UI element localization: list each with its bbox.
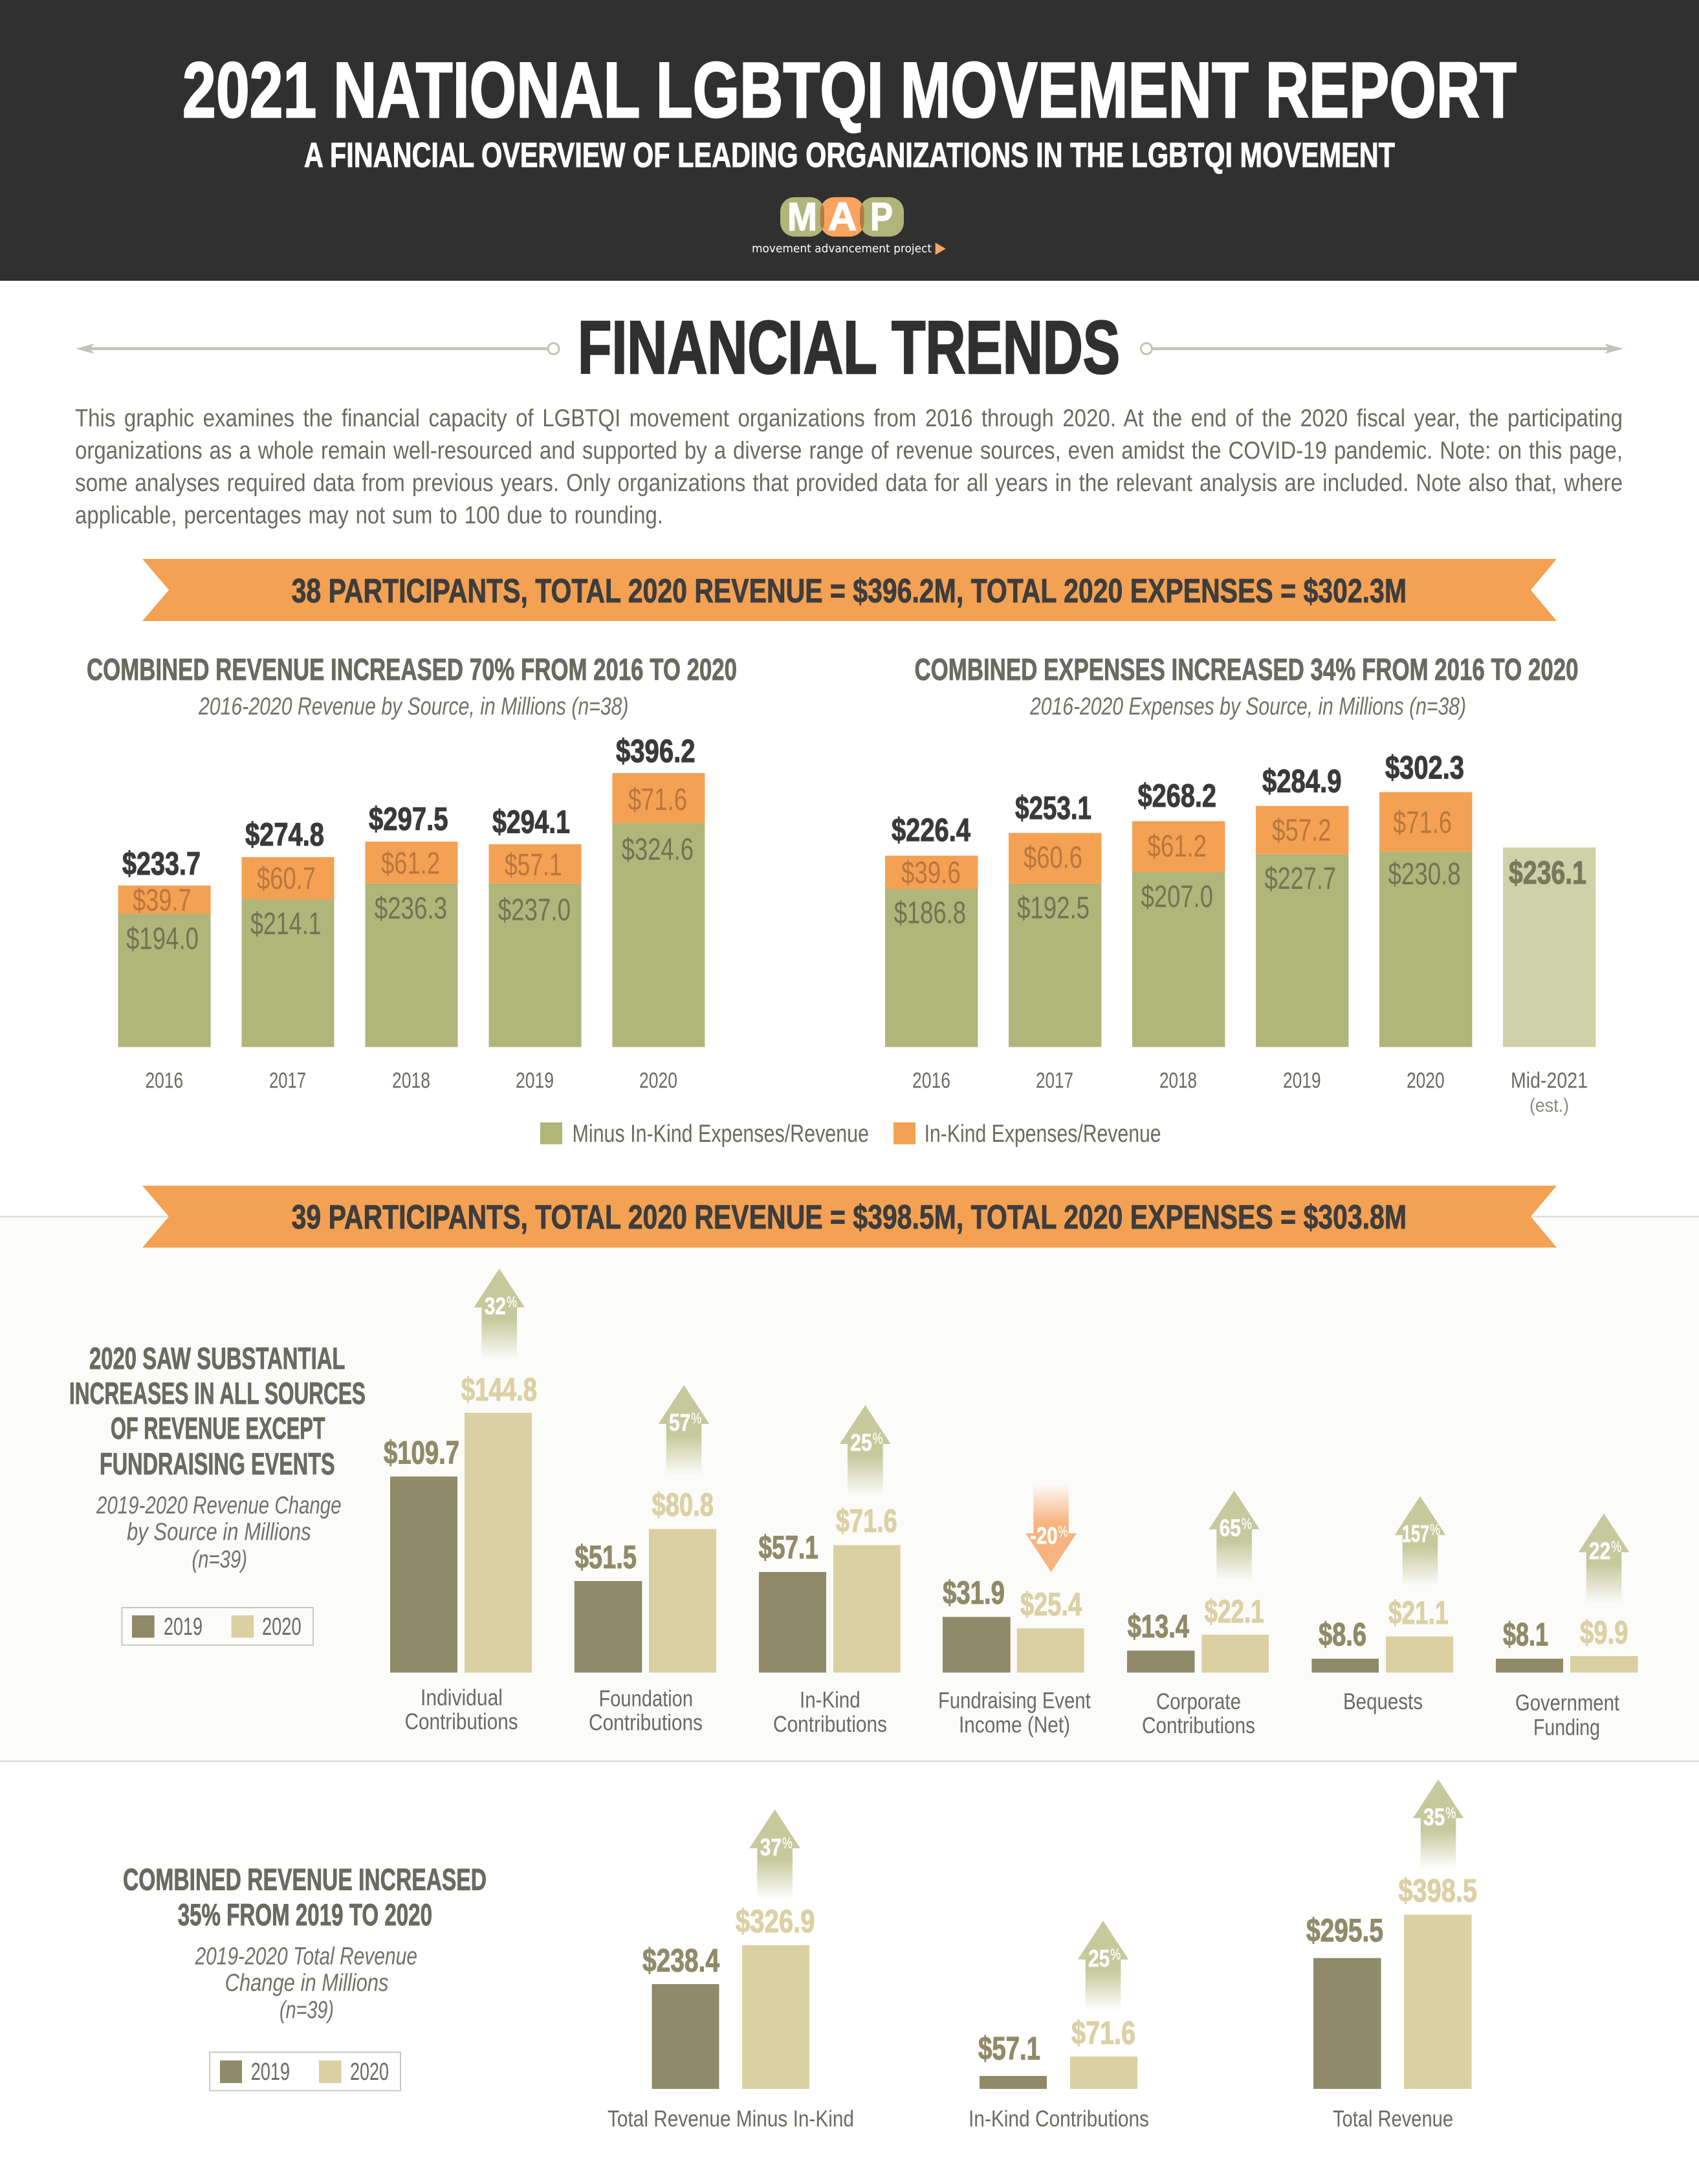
intro paragraph [75,405,1623,529]
bar: expenses 2020: $230.8 [1388,857,1461,891]
chart: government funding: Government [1515,1690,1619,1716]
arrow: 22% increase [1579,1513,1629,1603]
bar: expenses 2019: $227.7 [1264,862,1336,896]
arrow: 65% increase: 65 [1220,1515,1241,1542]
chart: in-kind contributions total: $71.6 [1071,2015,1135,2051]
text block: revenue change by source [69,1341,366,1573]
legend: 2019 and 2020, total revenue: 2020 [350,2058,389,2086]
bar: expenses 2016: 2016 [912,1069,950,1093]
arrow: 25% increase: % [873,1430,883,1448]
chart: individual contributions [384,1269,537,1734]
section heading: financial trends [76,305,1623,389]
legend: 2019 and 2020 [122,1608,313,1645]
text block: combined revenue increase: COMBINED REVENUE INCREASED [123,1862,487,1897]
bar: revenue 2018: $61.2 [381,847,440,881]
bar: expenses 2018: $61.2 [1148,829,1207,864]
bar: revenue 2017: $60.7 [257,862,316,896]
arrow: 57% increase: % [691,1410,701,1428]
chart: total revenue minus in-kind [608,1809,854,2132]
legend: 2019 and 2020: 2019 [164,1613,203,1641]
chart: foundation contributions: Contributions [589,1710,703,1735]
logo: MAP: movement advancement project [752,242,932,256]
chart: government funding [1496,1513,1638,1740]
bar: expenses 2020: $71.6 [1393,806,1452,840]
panel background: revenue by source [0,1217,1699,1762]
arrow: 157% increase: 157 [1402,1520,1429,1547]
chart: fundraising event income: $31.9 [943,1575,1005,1611]
chart: total revenue: $398.5 [1398,1873,1477,1909]
panel: combined expenses chart [885,652,1595,1117]
bar: expenses 2016: $226.4 [892,812,970,848]
chart: individual contributions: Individual [421,1685,503,1710]
bar: revenue 2017 [242,816,334,1093]
bar: expenses 2017: $60.6 [1024,841,1082,875]
bar: expenses 2017: $192.5 [1017,891,1090,926]
arrow: 35% increase [1413,1779,1463,1870]
section heading: financial trends: FINANCIAL TRENDS [578,305,1120,389]
intro paragraph: applicable, percentages may not sum to 100 due to rounding. [75,502,663,529]
arrow: 57% increase [659,1385,709,1475]
bar: revenue 2018: $297.5 [369,801,448,837]
arrow: 157% increase: % [1430,1521,1440,1538]
banner: 39 participants [142,1186,1557,1247]
text block: revenue change by source: 2020 SAW SUBSTANTIAL [89,1341,345,1375]
bar: revenue 2017: $274.8 [245,816,324,853]
bar: revenue 2020 [612,733,705,1093]
chart: total revenue minus in-kind: Total Revenue Minus In-Kind [608,2106,854,2132]
bar: revenue 2018: $236.3 [375,891,447,926]
chart: total revenue: Total Revenue [1333,2106,1453,2132]
chart: fundraising event income [938,1484,1091,1738]
chart: foundation contributions: $80.8 [652,1487,714,1523]
bar: expenses 2017: 2017 [1036,1069,1073,1093]
banner: 39 participants: 39 PARTICIPANTS, TOTAL 2020 REVENUE = $398.5M, TOTAL 2020 EXPENSES = $303.8M [292,1199,1407,1236]
bar: revenue 2019: $57.1 [505,848,562,882]
chart: in-kind contributions: $57.1 [758,1529,818,1566]
text block: combined revenue increase: Change in Millions [225,1970,388,1997]
text block: combined revenue increase: 35% FROM 2019 TO 2020 [178,1897,432,1932]
arrow: 25% increase: 25 [850,1430,872,1456]
bar: revenue 2018: 2018 [392,1069,430,1093]
bar: expenses 2016: $39.6 [901,856,961,890]
chart: in-kind contributions total: In-Kind Contributions [969,2106,1149,2132]
chart: government funding: $9.9 [1580,1615,1628,1651]
chart: in-kind contributions total [969,1921,1149,2132]
chart: in-kind contributions: $71.6 [836,1503,897,1539]
chart: individual contributions: Contributions [405,1709,518,1734]
arrow: 35% increase: % [1445,1805,1456,1822]
text block: revenue change by source: FUNDRAISING EVENTS [100,1447,335,1481]
bar: revenue 2020: $324.6 [622,833,694,867]
legend: 2019 and 2020, total revenue: 2019 [251,2058,290,2086]
legend: expenses and revenue: Minus In-Kind Expenses/Revenue [572,1120,869,1148]
chart: total revenue minus in-kind: $326.9 [736,1903,815,1939]
logo: MAP: A [828,195,857,239]
arrow: 157% increase [1395,1496,1445,1586]
arrow: 25% increase, in-kind [1078,1921,1128,2011]
logo: MAP: P [870,195,893,239]
chart: total revenue: $295.5 [1306,1912,1383,1949]
text block: combined revenue increase: (n=39) [280,1997,334,2024]
subtitle: A FINANCIAL OVERVIEW OF LEADING ORGANIZATIONS IN THE LGBTQI MOVEMENT [304,136,1395,175]
text block: revenue change by source: by Source in Millions [127,1519,311,1546]
header band [0,0,1699,281]
chart: corporate contributions [1127,1491,1269,1738]
bar: expenses 2020: 2020 [1407,1069,1445,1093]
bar: revenue 2019: 2019 [516,1069,554,1093]
bar: expenses 2018: 2018 [1159,1069,1197,1093]
chart: bequests [1311,1496,1453,1714]
arrow: 25% increase [840,1405,891,1495]
bar: expenses 2019: 2019 [1283,1069,1321,1093]
bar: expenses mid-2021 estimate [1503,847,1595,1117]
bar: revenue 2016 [118,846,211,1093]
bar: revenue 2019: $294.1 [492,804,570,840]
chart: individual contributions: $144.8 [461,1371,537,1408]
bar: revenue 2016: 2016 [145,1069,183,1093]
heading: revenue: COMBINED REVENUE INCREASED 70% FROM 2016 TO 2020 [87,652,737,686]
chart: fundraising event income: Income (Net) [959,1712,1070,1738]
arrow: 22% increase: 22 [1589,1538,1610,1564]
bar: expenses 2017 [1009,790,1101,1093]
text block: revenue change by source: 2019-2020 Revenue Change [96,1492,342,1519]
chart: government funding: Funding [1533,1715,1600,1740]
text block: revenue change by source: (n=39) [192,1546,247,1573]
bar: revenue 2016: $39.7 [133,884,192,918]
bar: revenue 2017: 2017 [269,1069,306,1093]
arrow: 37% increase: 37 [760,1834,782,1861]
bar: expenses 2019: $57.2 [1272,814,1332,848]
arrow: 25% increase, in-kind: 25 [1088,1945,1110,1972]
chart: bequests: $21.1 [1388,1595,1448,1631]
chart: foundation contributions [575,1385,716,1735]
bar: expenses 2020: $302.3 [1385,749,1464,785]
chart: corporate contributions: $22.1 [1205,1593,1264,1630]
chart: total revenue [1306,1779,1477,2132]
subheading: expenses: 2016-2020 Expenses by Source, in Millions (n=38) [1029,693,1466,721]
arrow: 22% increase: % [1611,1538,1621,1556]
text block: revenue change by source: INCREASES IN ALL SOURCES [69,1376,366,1410]
arrow: 37% increase: % [782,1835,793,1852]
chart: in-kind contributions: Contributions [773,1712,887,1737]
subheading: revenue: 2016-2020 Revenue by Source, in Millions (n=38) [198,693,629,721]
bar: revenue 2020: $71.6 [628,783,687,817]
chart: total revenue minus in-kind: $238.4 [642,1943,719,1979]
arrow: 25% increase, in-kind: % [1110,1946,1121,1963]
bar: revenue 2017: $214.1 [250,907,322,941]
arrow: 20% decrease [1025,1484,1077,1572]
arrow: 65% increase: % [1242,1516,1252,1533]
bar: revenue 2016: $233.7 [122,846,201,882]
legend: expenses and revenue [540,1120,1161,1148]
bar: revenue 2020: $396.2 [616,733,695,769]
chart: corporate contributions: Corporate [1156,1689,1241,1714]
logo: MAP: M [787,195,817,239]
arrow: 57% increase: 57 [669,1410,690,1436]
arrow: 20% decrease: -20 [1030,1523,1058,1549]
bar: revenue 2019 [489,804,581,1093]
bar: expenses 2018: $207.0 [1141,880,1213,914]
bar: expenses 2019 [1256,763,1348,1093]
arrow: 65% increase [1209,1491,1260,1580]
chart: foundation contributions: Foundation [599,1687,693,1712]
banner: 38 participants [142,559,1557,621]
chart: individual contributions: $109.7 [384,1434,459,1470]
bar: expenses mid-2021 estimate: $236.1 [1509,855,1586,891]
chart: bequests: $8.6 [1319,1617,1366,1653]
chart: fundraising event income: Fundraising Event [938,1688,1091,1714]
chart: government funding: $8.1 [1503,1617,1548,1653]
text block: combined revenue increase: 2019-2020 Total Revenue [195,1943,417,1971]
arrow: 32% increase: % [507,1294,517,1311]
arrow: 20% decrease: % [1058,1523,1068,1541]
bar: expenses 2020 [1379,749,1472,1093]
bar: revenue 2020: 2020 [639,1069,677,1093]
banner: 38 participants: 38 PARTICIPANTS, TOTAL 2020 REVENUE = $396.2M, TOTAL 2020 EXPENSES = $302.3M [292,573,1407,610]
chart: in-kind contributions total: $57.1 [978,2031,1040,2067]
bar: expenses 2016: $186.8 [894,896,966,930]
bar: expenses mid-2021 estimate: (est.) [1529,1095,1569,1117]
chart: corporate contributions: Contributions [1142,1713,1255,1738]
bar: expenses 2016 [885,812,978,1093]
bar: expenses mid-2021 estimate: Mid-2021 [1511,1069,1588,1093]
arrow: 35% increase: 35 [1423,1804,1445,1831]
bar: revenue 2019: $237.0 [498,893,571,928]
bar: expenses 2019: $284.9 [1262,763,1342,800]
bar: revenue 2018 [365,801,458,1093]
chart: fundraising event income: $25.4 [1020,1586,1082,1622]
panel: combined revenue chart [87,652,737,1093]
arrow: 32% increase [474,1269,525,1359]
arrow: 37% increase [749,1809,800,1899]
bar: expenses 2018: $268.2 [1138,778,1216,814]
text block: revenue change by source: OF REVENUE EXCEPT [111,1411,325,1445]
arrow: 32% increase: 32 [485,1293,506,1320]
logo: MAP [752,195,946,256]
chart: foundation contributions: $51.5 [575,1539,637,1575]
chart: in-kind contributions [758,1405,901,1737]
chart: corporate contributions: $13.4 [1128,1608,1189,1644]
chart: in-kind contributions: In-Kind [800,1687,860,1712]
bar: expenses 2018 [1132,778,1225,1093]
legend: 2019 and 2020, total revenue [210,2052,400,2091]
legend: expenses and revenue: In-Kind Expenses/Revenue [925,1120,1161,1148]
legend: 2019 and 2020: 2020 [262,1613,301,1641]
bar: expenses 2017: $253.1 [1015,790,1091,826]
text block: combined revenue increase [123,1862,487,2024]
bar: revenue 2016: $194.0 [126,922,199,956]
chart: bequests: Bequests [1343,1689,1423,1714]
